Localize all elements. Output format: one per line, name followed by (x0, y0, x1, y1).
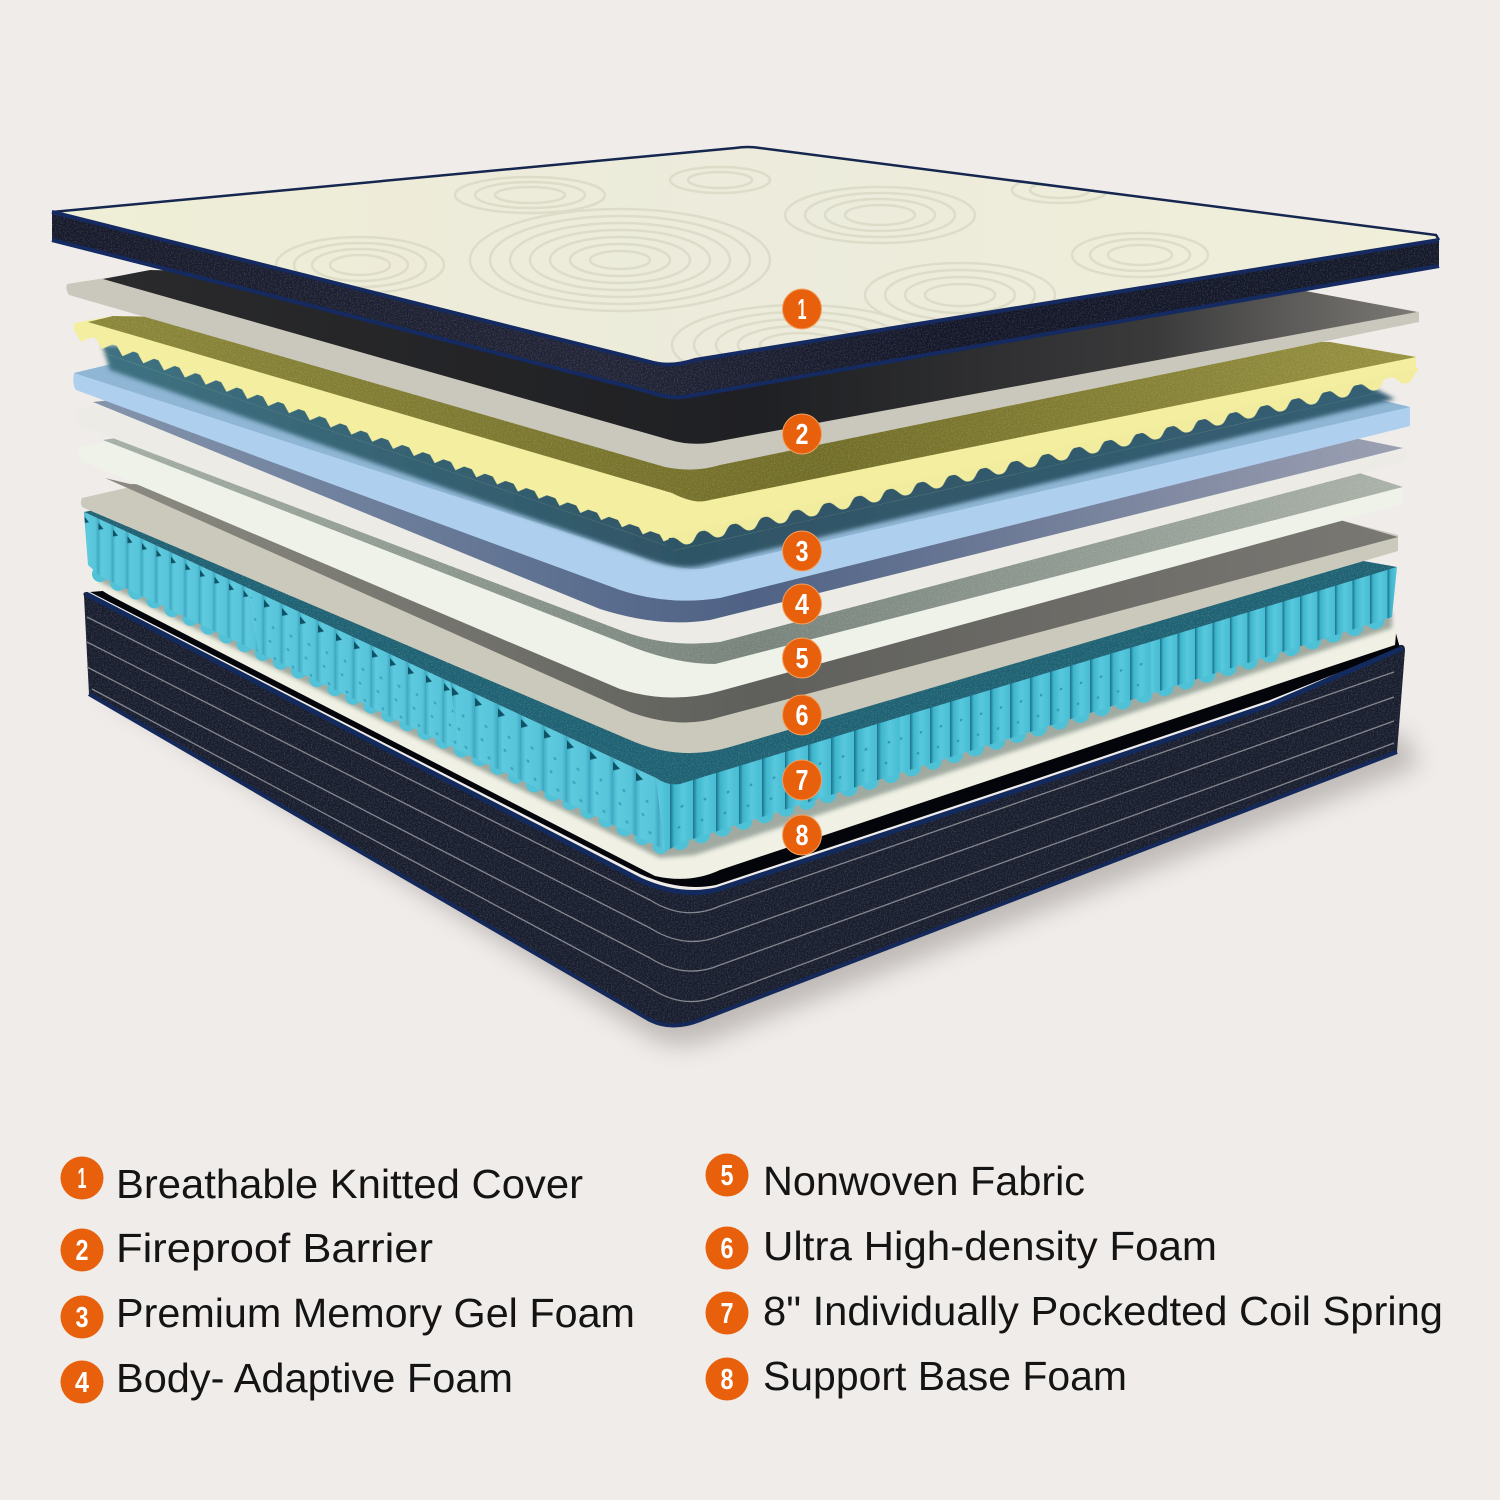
badge 5: 5 (796, 643, 808, 675)
legend item 6: 6 (720, 1233, 734, 1265)
legend item 5: 5 (720, 1160, 734, 1192)
legend item 4: Body- Adaptive Foam (116, 1355, 513, 1401)
badge 8: 8 (796, 820, 808, 852)
legend item 2: Fireproof Barrier (116, 1225, 433, 1271)
layer 5 nonwoven fabric (78, 436, 1403, 698)
legend item 5: Nonwoven Fabric (763, 1158, 1085, 1204)
badge 6: 6 (796, 700, 808, 732)
layer 1b fireproof barrier (66, 270, 1419, 470)
legend item 4: 4 (75, 1367, 89, 1399)
badge 4: 4 (795, 589, 809, 621)
layer 4 body-adaptive foam (75, 398, 1407, 644)
legend item 8: 8 (720, 1364, 734, 1396)
legend item 1: 1 (78, 1163, 86, 1195)
badge 5 (782, 638, 822, 678)
legend item 2: 2 (76, 1235, 88, 1267)
legend item 7: 8" Individually Pockedted Coil Spring (763, 1288, 1443, 1334)
layer 1 breathable knitted cover (52, 147, 1439, 397)
badge 1 (782, 289, 822, 329)
badge 3 (782, 531, 822, 571)
layer 3 premium memory gel foam (73, 345, 1410, 601)
badge 7: 7 (796, 765, 808, 797)
layer 8 support foam (89, 560, 1397, 879)
badge 1: 1 (798, 294, 806, 326)
layer 7 pocketed coil springs (84, 505, 1397, 850)
badge 3: 3 (796, 536, 808, 568)
mattress exploded diagram (52, 147, 1439, 1045)
badge 2: 2 (796, 419, 808, 451)
layer 8 base box (83, 590, 1405, 1026)
legend item 8: Support Base Foam (763, 1353, 1127, 1399)
badge 7 (782, 760, 822, 800)
badge 4 (782, 584, 822, 624)
legend item 7: 7 (720, 1298, 734, 1330)
floor shadow (100, 670, 1420, 1045)
layer 2 egg-crate top foam (69, 316, 1421, 551)
layer 6 ultra high-density foam (81, 478, 1398, 753)
badge 8 (782, 815, 822, 855)
badge 2 (782, 414, 822, 454)
legend item 3: 3 (76, 1302, 88, 1334)
badge 6 (782, 695, 822, 735)
legend item 6: Ultra High-density Foam (763, 1223, 1217, 1269)
legend item 1: Breathable Knitted Cover (116, 1161, 583, 1207)
legend item 3: Premium Memory Gel Foam (116, 1290, 635, 1336)
